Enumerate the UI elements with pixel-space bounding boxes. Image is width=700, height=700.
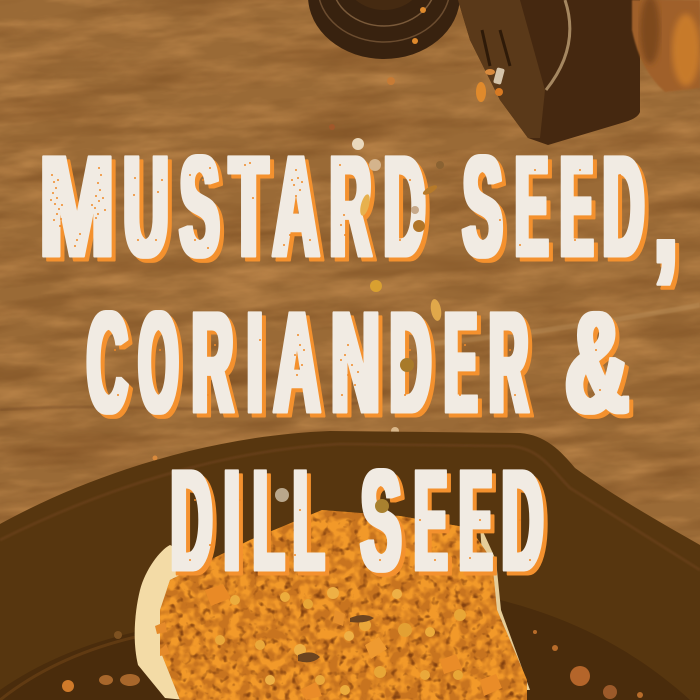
title face layer: R [192,282,233,443]
title shadow layer: , [658,136,681,297]
title face layer: I [224,440,240,601]
title shadow layer: E [520,130,552,291]
title shadow layer: E [448,286,481,447]
title shadow layer: A [277,130,323,291]
title face layer: & [565,282,629,443]
butter under the spice [135,525,530,700]
title face layer: , [654,132,677,293]
title shadow layer: M [44,130,118,291]
title face layer: D [384,126,425,287]
title face layer: E [444,282,477,443]
title face layer: M [40,126,114,287]
title face layer: D [390,282,431,443]
title face layer: O [139,282,178,443]
falling spice particles behind title [152,7,505,460]
title shadow layer: D [388,130,429,291]
title shadow layer: U [128,130,172,291]
title face layer: S [180,126,219,287]
title face layer: S [361,440,401,601]
title shadow layer: S [467,130,506,291]
title shadow layer: D [175,444,216,605]
title shadow layer: S [184,130,223,291]
title shadow layer: D [394,286,435,447]
shaker lid at top [308,0,460,59]
spice jar at top right [632,0,700,92]
title face layer: E [460,440,492,601]
title face layer [40,126,677,601]
spice crust on top [160,510,527,700]
title face layer: A [273,126,319,287]
title shadow layer: R [334,130,375,291]
title shadow layer [44,130,681,605]
title face layer: C [87,282,127,443]
title face layer: D [171,440,212,601]
title shadow layer: T [234,130,272,291]
title shadow layer: I [228,444,244,605]
title face layer: R [330,126,371,287]
title face layer: N [331,282,380,443]
title shadow layer: A [278,286,324,447]
cast iron skillet [0,431,700,700]
title face layer: E [414,440,447,601]
title shadow layer: E [564,130,597,291]
title: Mustard Seed, Coriander & Dill Seed [40,126,681,605]
title face layer: I [247,282,263,443]
title face layer: L [253,440,284,601]
title shadow layer: N [335,286,384,447]
title face layer: E [560,126,593,287]
scattered spice crumbs in the pan [62,622,643,699]
title face layer: T [230,126,268,287]
title shadow layer: E [464,444,496,605]
title shadow layer: R [493,286,532,447]
title shadow layer: I [251,286,267,447]
title shadow layer: R [196,286,237,447]
title face layer: A [274,282,320,443]
falling spice particles over title [275,159,444,513]
title shadow layer: L [297,444,328,605]
title shadow layer: O [143,286,182,447]
title face layer: U [124,126,168,287]
title face layer: R [489,282,528,443]
title shadow layer: & [569,286,633,447]
title shadow layer: S [365,444,405,605]
shaker block at top right [458,0,640,145]
title face layer: D [502,440,543,601]
title shadow layer: D [506,444,547,605]
title face layer: E [516,126,548,287]
title shadow layer: C [91,286,131,447]
title face layer: L [293,440,324,601]
title shadow layer: L [257,444,288,605]
title face layer: S [463,126,502,287]
distressed orange speckles on letters [51,163,620,560]
title shadow layer: E [418,444,451,605]
